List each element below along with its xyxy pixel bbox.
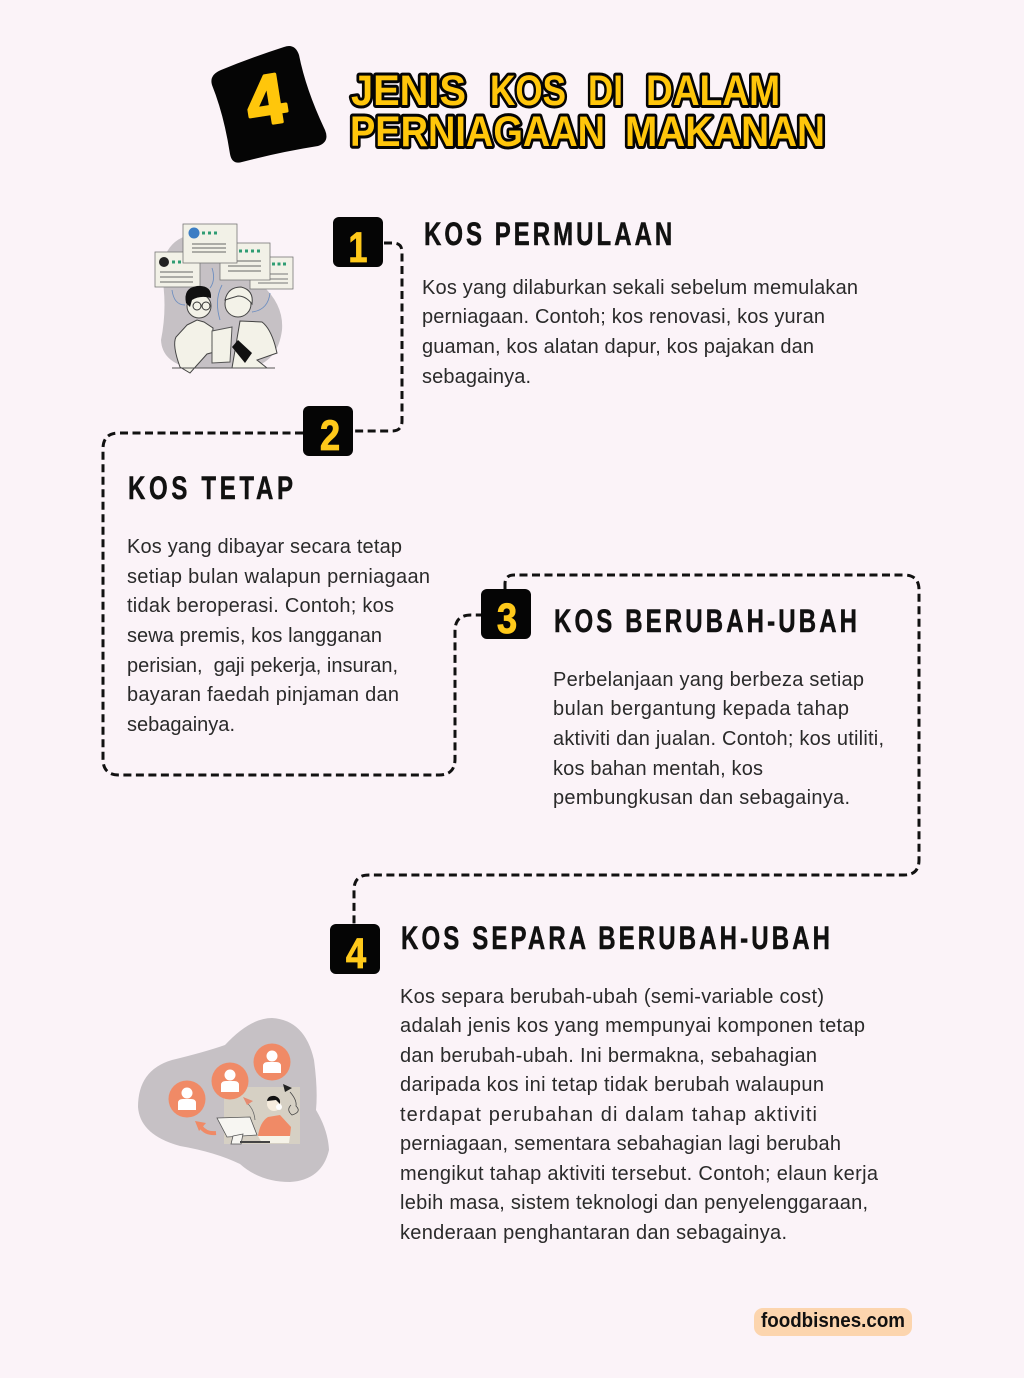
badge 4 [330, 924, 380, 978]
body text: kenderaan penghantaran dan sebagainya. [400, 1222, 787, 1244]
body text [127, 536, 430, 736]
body text: tidak beroperasi. Contoh; kos [127, 595, 394, 617]
body text: sebagainya. [127, 714, 235, 736]
body text: kos bahan mentah, kos [553, 758, 763, 780]
arrow curved left [195, 1121, 216, 1133]
dashed connector 1 to 2 [353, 243, 402, 431]
title badge: 4 [241, 58, 291, 142]
arrow to middle customer [243, 1097, 255, 1120]
dashed connector 2 to 3 [103, 433, 481, 775]
body text [422, 277, 858, 388]
badge 1 [333, 217, 383, 272]
step 1 [333, 216, 858, 388]
badge 3 [481, 589, 531, 643]
heading: KOS BERUBAH-UBAH [554, 603, 857, 639]
step 2 [127, 406, 430, 736]
title badge [211, 46, 326, 163]
body text [400, 986, 879, 1244]
agent [258, 1096, 291, 1143]
body text: Kos yang dibayar secara tetap [127, 536, 402, 558]
title text: PERNIAGAAN [350, 108, 605, 156]
body text: perniagaan. Contoh; kos renovasi, kos yuran [422, 306, 825, 328]
body text: setiap bulan walapun perniagaan [127, 566, 430, 588]
body text: sewa premis, kos langganan [127, 625, 382, 647]
body text: lebih masa, sistem teknologi dan penyelenggaraan, [400, 1192, 868, 1214]
floor line [172, 367, 275, 369]
title text: JENIS [351, 67, 466, 115]
heading: KOS SEPARA BERUBAH-UBAH [401, 920, 830, 956]
paper and book [212, 327, 252, 363]
body text: terdapat perubahan di dalam tahap aktiviti [400, 1104, 817, 1126]
body text: perniagaan, sementara sebahagian lagi berubah [400, 1133, 841, 1155]
customer icon right [254, 1044, 290, 1080]
website pill: foodbisnes.com [761, 1310, 905, 1332]
body text: daripada kos ini tetap tidak berubah walaupun [400, 1074, 824, 1096]
step 3 [481, 589, 884, 809]
badge 3: 3 [497, 595, 517, 643]
blue squiggles [172, 268, 270, 320]
background blob [161, 235, 282, 368]
body text: bulan bergantung kepada tahap [553, 698, 849, 720]
title text: DALAM [646, 67, 780, 115]
badge 2 [303, 406, 353, 460]
step 4 [330, 920, 879, 1244]
title block [211, 46, 825, 163]
arrow to right customer [283, 1084, 298, 1115]
review card far left [155, 252, 200, 287]
background blob [138, 1018, 329, 1182]
body text: Kos separa berubah-ubah (semi-variable cost) [400, 986, 824, 1008]
body text: Kos yang dilaburkan sekali sebelum memulakan [422, 277, 858, 299]
badge 2: 2 [320, 412, 340, 460]
body text: dan berubah-ubah. Ini bermakna, sebahagian [400, 1045, 817, 1067]
title text: DI [588, 67, 623, 115]
title text [350, 67, 825, 156]
body text: adalah jenis kos yang mempunyai komponen tetap [400, 1015, 865, 1037]
body text: mengikut tahap aktiviti tersebut. Contoh; elaun kerja [400, 1163, 879, 1185]
body text: sebagainya. [422, 366, 531, 388]
body text [553, 669, 884, 809]
heading: KOS TETAP [128, 470, 293, 506]
title text: KOS [490, 67, 566, 115]
body text: pembungkusan dan sebagainya. [553, 787, 850, 809]
body text: perisian, gaji pekerja, insuran, [127, 655, 398, 677]
review card middle right [220, 243, 270, 280]
body text: bayaran faedah pinjaman dan [127, 684, 399, 706]
illustration: customer service agent [138, 1018, 329, 1182]
title text: MAKANAN [625, 108, 825, 156]
dashed connector 3 to 4 [354, 575, 919, 924]
computer [217, 1117, 270, 1144]
customer icon middle [212, 1062, 248, 1100]
illustration: people reading reviews [155, 224, 293, 373]
badge 4: 4 [346, 930, 366, 978]
body text: Perbelanjaan yang berbeza setiap [553, 669, 864, 691]
person right [225, 287, 277, 368]
customer icon left [168, 1080, 206, 1118]
badge 1: 1 [348, 224, 368, 272]
review card far right [250, 257, 293, 289]
heading: KOS PERMULAAN [424, 216, 672, 252]
agent backdrop [224, 1087, 300, 1144]
body text: aktiviti dan jualan. Contoh; kos utiliti, [553, 728, 884, 750]
body text: guaman, kos alatan dapur, kos pajakan dan [422, 336, 814, 358]
person left [175, 286, 222, 373]
review card top [183, 224, 237, 263]
